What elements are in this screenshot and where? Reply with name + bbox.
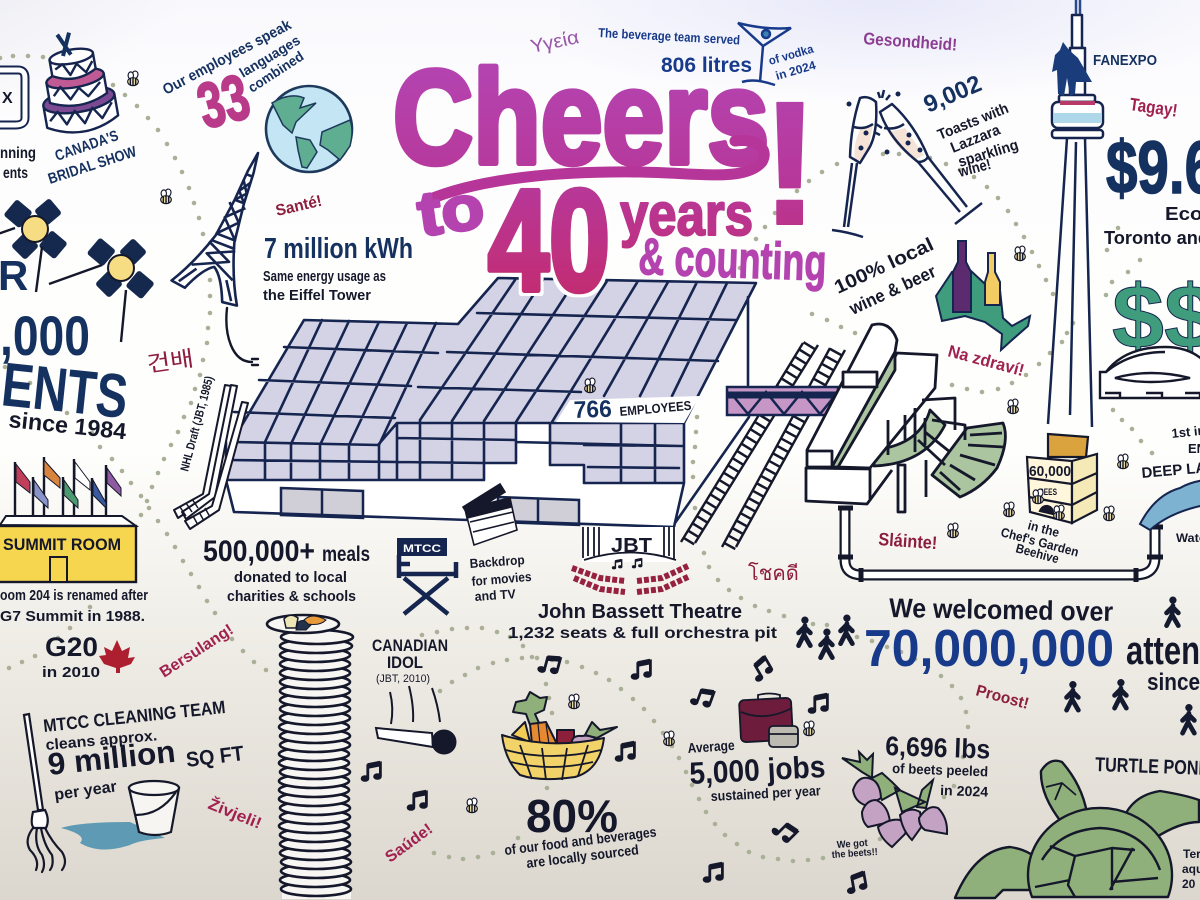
text: 80 percent: of our food and beverages [503, 823, 657, 858]
main convention centre building [226, 278, 756, 527]
text: backdrop: and TV [474, 586, 516, 604]
text: 6696 lbs [885, 731, 991, 800]
text: Summit Room: SUMMIT ROOM [3, 535, 121, 554]
text: X: X [2, 90, 13, 107]
text: toasts: Toasts with [935, 100, 1011, 144]
text: Tagay: Tagay! [1128, 94, 1179, 121]
text: cleaning team: MTCC CLEANING TEAM [42, 697, 226, 736]
text: Yia: Υγεία [529, 27, 581, 58]
title word: Cheers: Cheers [393, 44, 769, 192]
icon: stadium dome [1100, 347, 1200, 399]
text: 80 percent: 80% [526, 790, 618, 842]
icon: director chair [397, 538, 458, 614]
icon: champagne glasses [832, 90, 982, 237]
text: 500,000+ meals: charities & schools [227, 588, 356, 605]
middle tier [46, 73, 108, 110]
icon: clapperboard [463, 484, 517, 545]
left flute [854, 125, 924, 161]
icon: hockey sticks [174, 385, 248, 529]
text: 500,000+ meals [203, 535, 370, 605]
text: 7 million kWh [263, 233, 413, 304]
text: 500,000+ meals: 500,000+ [203, 535, 315, 568]
text: Proost: Proost! [974, 682, 1031, 713]
turtle shell [1028, 808, 1172, 897]
text: Na zdravi: Na zdraví! [946, 342, 1026, 380]
turtle head [1041, 761, 1087, 823]
beet leaves [842, 752, 933, 812]
text: Planning events [0, 145, 36, 182]
water pipe [838, 507, 1163, 582]
text: backdrop: Backdrop [469, 552, 525, 571]
icon: microphone [376, 686, 456, 754]
text: 7 million kWh: 7 million kWh [264, 233, 413, 265]
text: welcomed 70,000,000 [864, 593, 1200, 696]
text: backdrop [469, 552, 532, 604]
icon: globe [266, 86, 352, 172]
icon: walking people [799, 597, 1194, 733]
text: cleaning team [42, 697, 245, 804]
text: 60,000 bees [1029, 463, 1071, 497]
text: Fanexpo: FANEXPO [1093, 52, 1157, 69]
text: Bersulang: Bersulang! [157, 621, 237, 681]
text: Slainte: Sláinte! [878, 529, 938, 553]
text: 500,000+ meals: meals [322, 543, 370, 566]
icon: power cord [226, 308, 258, 365]
text: Room 204 renamed: G7 Summit in 1988. [0, 608, 145, 625]
top tier [50, 53, 97, 82]
text: over X000 events: ,000 [0, 304, 90, 367]
beet roots [853, 778, 881, 806]
text: Chef's Garden Beehive: Chef's Garden [999, 524, 1080, 560]
text: John Bassett Theatre [508, 601, 778, 642]
bottom tier [43, 94, 120, 138]
title exclamation mark: ! [761, 66, 819, 262]
text: 60,000 bees: BEES [1039, 487, 1057, 497]
icon: CN Tower [1048, 0, 1103, 427]
text: cleaning team: SQ FT [185, 742, 245, 772]
text: toasts: Lazzara [948, 121, 1003, 157]
icon: G7 flags [15, 457, 121, 520]
text: Sante: Santé! [274, 193, 324, 220]
employees band [556, 396, 700, 424]
text: Chokdee: โชคดี [748, 562, 799, 585]
icon: superhero [1052, 42, 1092, 96]
text: Canadian Idol [372, 636, 448, 685]
wall doors [281, 488, 579, 525]
text: Room 204 renamed: oom 204 is renamed after [0, 587, 148, 604]
text: John Bassett Theatre: John Bassett Theatre [538, 601, 742, 623]
text: economic impact [1104, 126, 1200, 248]
icon: briefcase [739, 694, 798, 747]
icon: martini glass [738, 23, 791, 85]
text: Canadian Idol: IDOL [387, 653, 423, 672]
icon: pipe with letters [0, 70, 25, 125]
food on top plate [284, 615, 298, 628]
text: cleaning team: per year [53, 778, 118, 804]
icon: food basket [502, 692, 617, 780]
text: Planning events: ents [3, 165, 28, 182]
text: 766: 766 [573, 396, 612, 424]
text: vodka stat: The beverage team served [598, 25, 740, 47]
icon: stage notes [612, 559, 642, 569]
carrots [530, 722, 557, 744]
text: 7 million kWh: the Eiffel Tower [263, 287, 371, 304]
text: vodka stat: 806 litres [661, 54, 752, 77]
text: 5000 jobs: sustained per year [710, 782, 821, 804]
icon: wedding cake [32, 27, 120, 138]
roof and window panels [226, 278, 756, 483]
icon: music notes [361, 653, 868, 895]
text: toasts: sparkling [956, 136, 1020, 171]
icon: door [50, 557, 67, 582]
basket body [502, 735, 604, 779]
theatre seats [572, 566, 690, 592]
text: Geonbae: 건배 [145, 346, 195, 377]
title number: 40: 40 [488, 160, 610, 321]
text: 7 million kWh: Same energy usage as [263, 268, 386, 285]
text: employees languages: combined [245, 48, 306, 96]
escalators [681, 343, 845, 547]
text: Saude: Saúde! [382, 821, 436, 866]
text: 6696 lbs: of beets peeled [892, 760, 988, 779]
icon: bees [128, 70, 1129, 813]
text: Gesondheid: Gesondheid! [863, 29, 958, 55]
text: vodka stat: of vodka [767, 42, 815, 68]
text: 500,000+ meals: donated to local [234, 569, 347, 586]
text: deep lake [1141, 423, 1200, 482]
text: Planning events: nning [0, 145, 36, 162]
fan canopy [932, 423, 1005, 497]
text: G20 in 2010: G20 [45, 632, 98, 662]
text: employees languages: 33 [190, 60, 257, 143]
text: Canadian Idol: CANADIAN [372, 636, 448, 655]
text: employees languages [160, 16, 306, 143]
icon: beehive [1027, 434, 1097, 523]
text: Canada's Bridal Show: CANADA'S [53, 127, 121, 165]
text: employees languages: languages [236, 32, 303, 81]
text: toasts [920, 70, 1020, 181]
text: Chef's Garden Beehive: in the [1026, 517, 1061, 540]
text: employees languages: Our employees speak [160, 16, 295, 99]
text: local wine and beer [831, 234, 939, 319]
text: 80 percent [503, 790, 657, 871]
text: 5000 jobs: 5,000 jobs [689, 749, 826, 791]
text: turtle note [1182, 847, 1200, 891]
text: MTCC: MTCC [403, 543, 441, 555]
icon: mop [24, 714, 65, 872]
icon: maple leaf [99, 640, 135, 673]
text: welcomed 70,000,000: We welcomed over [889, 593, 1114, 627]
text: 5000 jobs [687, 737, 826, 804]
lettuce [513, 692, 547, 725]
pink bridge [727, 387, 838, 415]
title swoosh [428, 140, 764, 200]
text: Chef's Garden Beehive: Beehive [1014, 540, 1061, 566]
text: We got the beets: We got [836, 838, 869, 851]
text: JBT: JBT [611, 535, 652, 557]
text: welcomed 70,000,000: 70,000,000 [864, 620, 1114, 678]
icon: puddle [61, 822, 165, 850]
icon: plate stack [267, 615, 353, 899]
text: local wine and beer: 100% local [831, 234, 937, 299]
icon: beets [842, 752, 947, 847]
text: Canada's Bridal Show: BRIDAL SHOW [46, 143, 139, 188]
text: cleaning team: cleans approx. [45, 727, 158, 754]
icon: stage lights [0, 198, 155, 342]
text: over X000 events: since 1984 [7, 406, 128, 444]
text: Canadian Idol: (JBT, 2010) [376, 673, 430, 685]
text: Room 204 renamed [0, 587, 148, 625]
icon: bucket [129, 781, 179, 835]
text: backdrop: for movies [471, 569, 532, 589]
text: We got the beets [831, 838, 878, 861]
text: 60,000 bees: 60,000 [1029, 463, 1071, 480]
icon: deep lake [1140, 480, 1200, 545]
text: over X000 events: ENTS [0, 350, 131, 432]
title word: to: to [413, 172, 488, 250]
icon: Ontario map and bottles [936, 241, 1030, 350]
right flute [880, 104, 982, 224]
text: toasts: wine! [956, 156, 993, 181]
text: 5000 jobs: Average [687, 737, 735, 756]
icon: Eiffel tower [171, 140, 291, 307]
text: 6696 lbs: in 2024 [940, 782, 989, 800]
icon: chest [769, 726, 798, 747]
JBT stage [572, 527, 690, 592]
text: turtle note: 20 [1182, 877, 1196, 891]
text: 6696 lbs: 6,696 lbs [885, 731, 991, 765]
text: cleaning team: 9 million [46, 734, 177, 782]
text: over X000 events [0, 252, 131, 444]
summit room building [0, 516, 136, 582]
text: vodka stat: in 2024 [774, 58, 818, 83]
text: John Bassett Theatre: 1,232 seats & full orchestra pit [508, 625, 778, 642]
text: G20 in 2010 [42, 632, 100, 681]
text: local wine and beer: wine & beer [845, 261, 939, 319]
turnips and leaves [572, 736, 600, 746]
text: G20 in 2010: in 2010 [42, 664, 100, 681]
text: vodka stat [598, 25, 818, 83]
text: Zivjeli: Živjeli! [206, 794, 265, 833]
title word: years: years [620, 181, 753, 248]
title: Cheers to 40 years and counting [393, 44, 827, 321]
text: We got the beets: the beets!! [831, 847, 878, 861]
text: 80 percent: are locally sourced [525, 841, 640, 871]
turtle flippers [955, 791, 1199, 898]
text: NHL Draft: NHL Draft (JBT, 1985) [177, 374, 216, 473]
title words: and counting: & counting [638, 228, 827, 293]
right wing building [806, 324, 1005, 512]
icon: turtle [955, 761, 1199, 898]
text: employees: EMPLOYEES [619, 398, 692, 419]
text: toasts: 9,002 [920, 70, 986, 119]
